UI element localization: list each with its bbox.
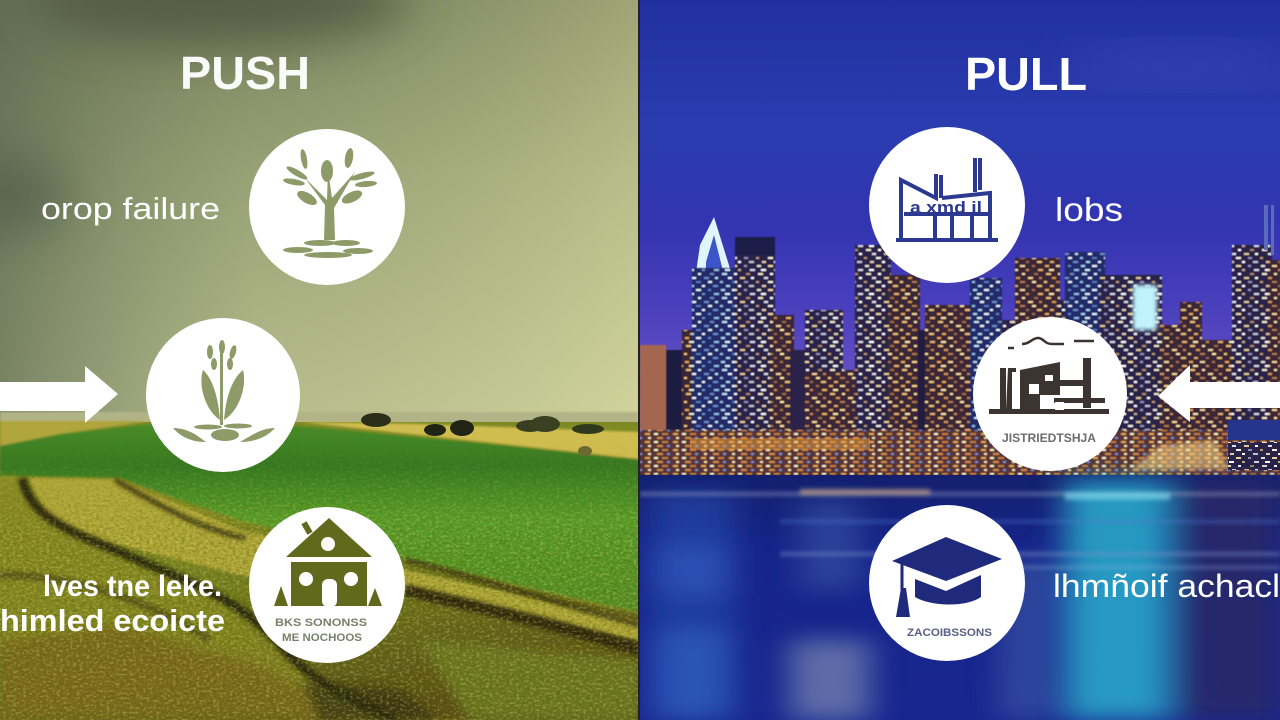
icon: graduation cap [869,505,1025,661]
icon: industrial buildings [973,317,1127,471]
arrow: push right [0,366,118,423]
icon: sprouting plant [146,318,300,472]
arrow: pull left [1158,365,1280,422]
label: lives in the lake, limited schools: lves tne leke. [43,570,222,603]
icon: house: ME NOCHOOS [282,632,362,644]
label: limited schools: lhmñoif achacl [1053,568,1280,604]
label: jobs: lobs [1055,191,1123,228]
label: lives in the lake, limited schools: himled ecoicte [0,603,225,638]
icon: factory [869,127,1025,283]
icon: withered tree [249,129,405,285]
label: lives in the lake, limited schools [0,570,225,638]
panel: pull [640,0,1280,720]
icon: graduation cap: ZACOIBSSONS [907,627,992,639]
heading: PULL: PULL [965,48,1087,100]
panel: push [0,0,640,720]
heading: PUSH: PUSH [180,47,310,99]
countryside background [0,0,640,720]
icon: house [249,507,405,663]
city background [640,0,1280,720]
icon: factory: a xmd il [910,198,982,217]
label: crop failure: orop failure [41,191,220,226]
icon: house: BKS SONONSS [275,617,367,629]
icon: industrial buildings: JISTRIEDTSHJA [1002,431,1096,445]
